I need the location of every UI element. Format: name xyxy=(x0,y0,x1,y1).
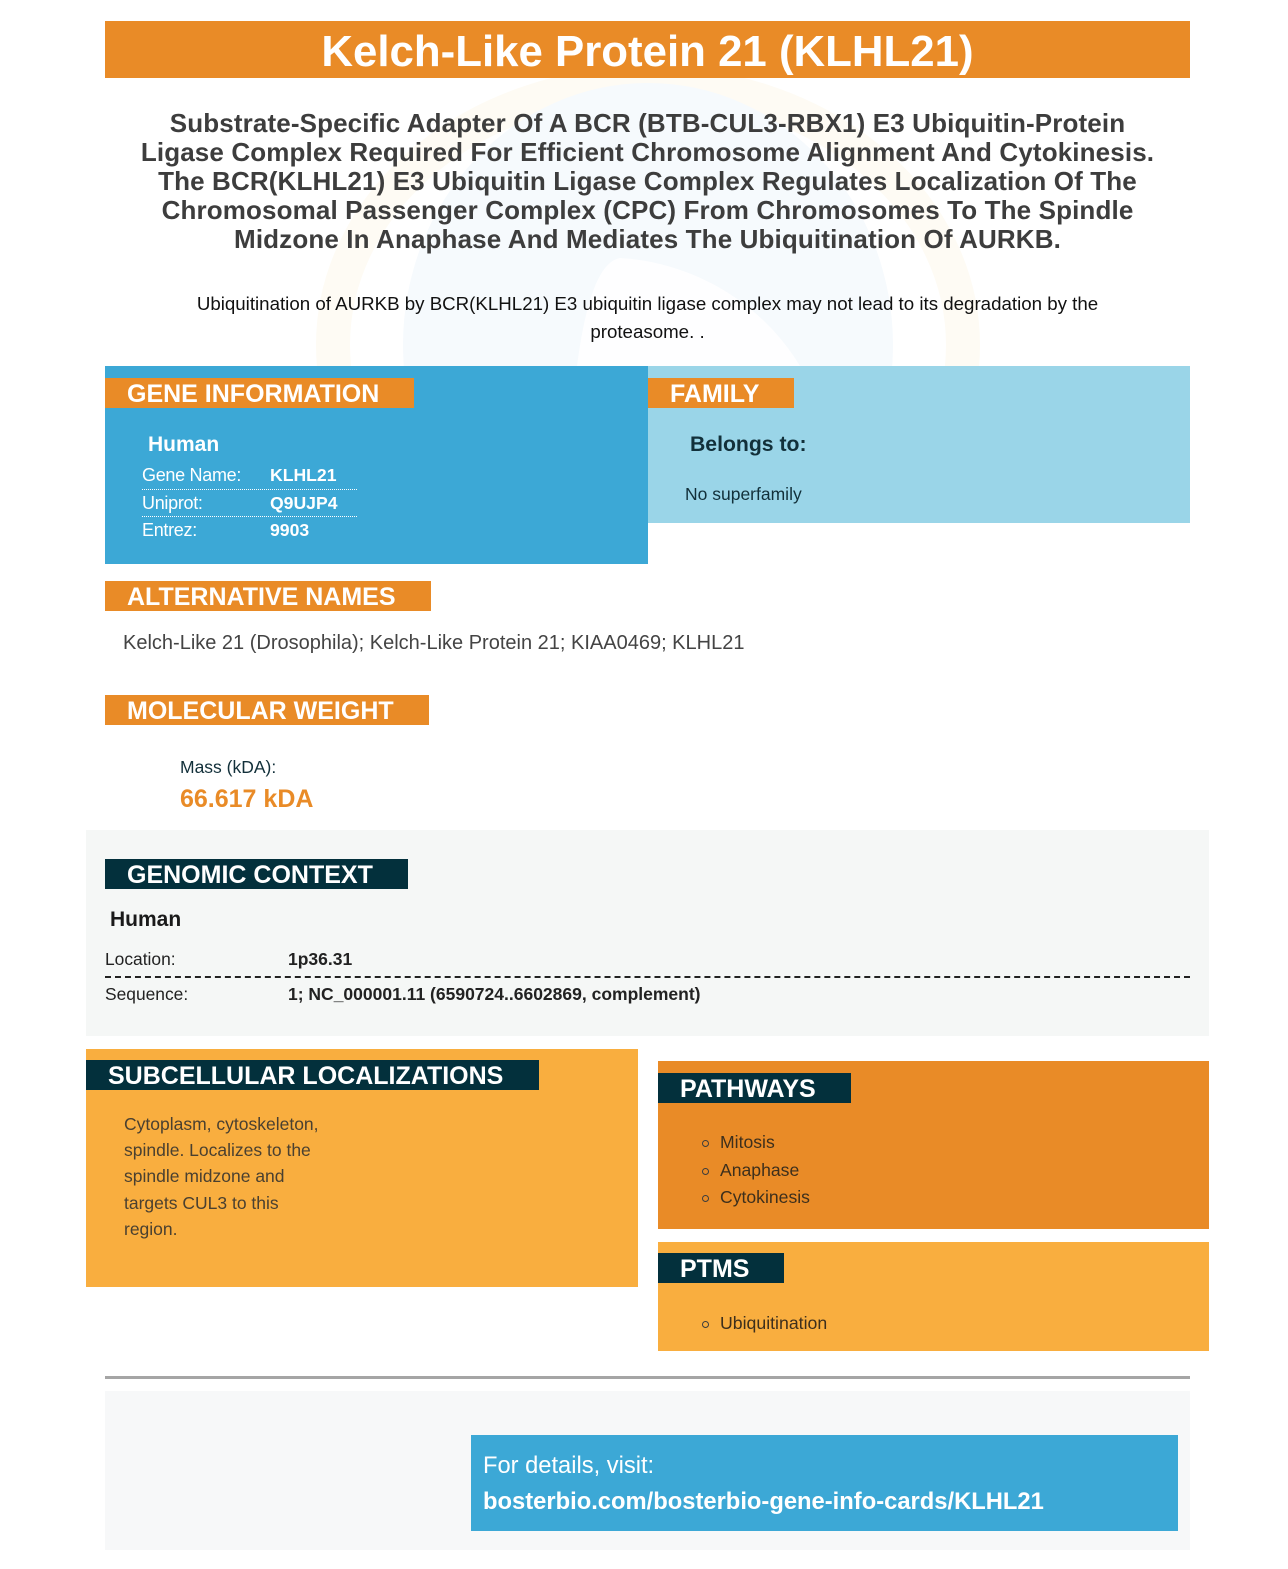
localization text: targets CUL3 to this xyxy=(124,1193,279,1213)
mass value: 66.617 kDA xyxy=(180,785,313,813)
uniprot row: Uniprot: xyxy=(142,493,203,513)
watermark logo xyxy=(316,78,980,366)
pathway list: Anaphase xyxy=(720,1160,799,1180)
subtitle: Midzone In Anaphase And Mediates The Ubiquitination Of AURKB. xyxy=(234,224,1061,254)
ptm list: Ubiquitination xyxy=(720,1313,827,1333)
species label: Human xyxy=(110,908,181,931)
pathway list: Mitosis xyxy=(720,1132,775,1152)
subtitle xyxy=(141,108,1154,254)
gene name row: Gene Name: xyxy=(142,465,241,485)
species label: Human xyxy=(148,433,219,456)
panel: footer xyxy=(105,1391,1190,1550)
pathway list xyxy=(702,1132,810,1207)
heading: family xyxy=(648,378,794,408)
entrez row xyxy=(142,520,309,540)
sequence row xyxy=(105,984,700,1004)
sequence row: 1; NC_000001.11 (6590724..6602869, complement) xyxy=(288,984,700,1004)
localization text: Cytoplasm, cytoskeleton, xyxy=(124,1114,319,1134)
gene name row: KLHL21 xyxy=(270,465,336,485)
callout url: bosterbio.com/bosterbio-gene-info-cards/KLHL21 xyxy=(483,1488,1044,1515)
entrez row: 9903 xyxy=(270,520,309,540)
heading: pathways xyxy=(658,1073,851,1103)
heading: genomic context: GENOMIC CONTEXT xyxy=(127,861,373,889)
uniprot row: Q9UJP4 xyxy=(270,493,337,513)
pathway list: Cytokinesis xyxy=(720,1187,810,1207)
heading: ptms xyxy=(658,1253,784,1283)
location row: Location: xyxy=(105,949,176,969)
localization text: spindle midzone and xyxy=(124,1166,285,1186)
heading: molecular weight: MOLECULAR WEIGHT xyxy=(127,697,394,725)
description: Ubiquitination of AURKB by BCR(KLHL21) E3 ubiquitin ligase complex may not lead to its degradation by the xyxy=(197,293,1098,314)
callout label: For details, visit: xyxy=(483,1453,654,1479)
gene name row xyxy=(142,463,357,490)
panel: genomic context xyxy=(86,830,1209,1036)
localization text: spindle. Localizes to the xyxy=(124,1140,311,1160)
localization text xyxy=(124,1114,319,1239)
mass label: Mass (kDA): xyxy=(180,757,276,777)
heading: ptms: PTMS xyxy=(680,1255,749,1283)
alternative names text: Kelch-Like 21 (Drosophila); Kelch-Like Protein 21; KIAA0469; KLHL21 xyxy=(123,632,744,654)
heading: alternative names: ALTERNATIVE NAMES xyxy=(127,583,396,611)
belongs to label: Belongs to: xyxy=(690,433,807,456)
subtitle: The BCR(KLHL21) E3 Ubiquitin Ligase Complex Regulates Localization Of The xyxy=(158,166,1137,196)
heading: subcellular localizations: SUBCELLULAR LOCALIZATIONS xyxy=(108,1062,503,1090)
heading: gene information: GENE INFORMATION xyxy=(127,380,379,408)
superfamily text: No superfamily xyxy=(685,484,802,504)
location row: 1p36.31 xyxy=(288,949,352,969)
sequence row: Sequence: xyxy=(105,984,188,1004)
subtitle: Ligase Complex Required For Efficient Chromosome Alignment And Cytokinesis. xyxy=(141,137,1154,167)
panel: subcellular localizations xyxy=(86,1049,638,1287)
title: Kelch-Like Protein 21 (KLHL21) xyxy=(321,27,974,76)
panel: pathways xyxy=(658,1061,1209,1229)
location row xyxy=(105,947,1190,978)
panel: family xyxy=(648,366,1190,523)
subtitle: Substrate-Specific Adapter Of A BCR (BTB-CUL3-RBX1) E3 Ubiquitin-Protein xyxy=(170,108,1125,138)
localization text: region. xyxy=(124,1219,178,1239)
subtitle: Chromosomal Passenger Complex (CPC) From Chromosomes To The Spindle xyxy=(162,195,1133,225)
panel: gene information xyxy=(105,366,648,564)
heading: family: FAMILY xyxy=(670,380,759,408)
entrez row: Entrez: xyxy=(142,520,197,540)
description xyxy=(197,293,1098,342)
panel: ptms xyxy=(658,1242,1209,1351)
title xyxy=(105,21,1190,78)
uniprot row xyxy=(142,493,357,517)
heading: pathways: PATHWAYS xyxy=(680,1075,816,1103)
callout: details link xyxy=(471,1435,1178,1531)
description: proteasome. . xyxy=(590,321,705,342)
